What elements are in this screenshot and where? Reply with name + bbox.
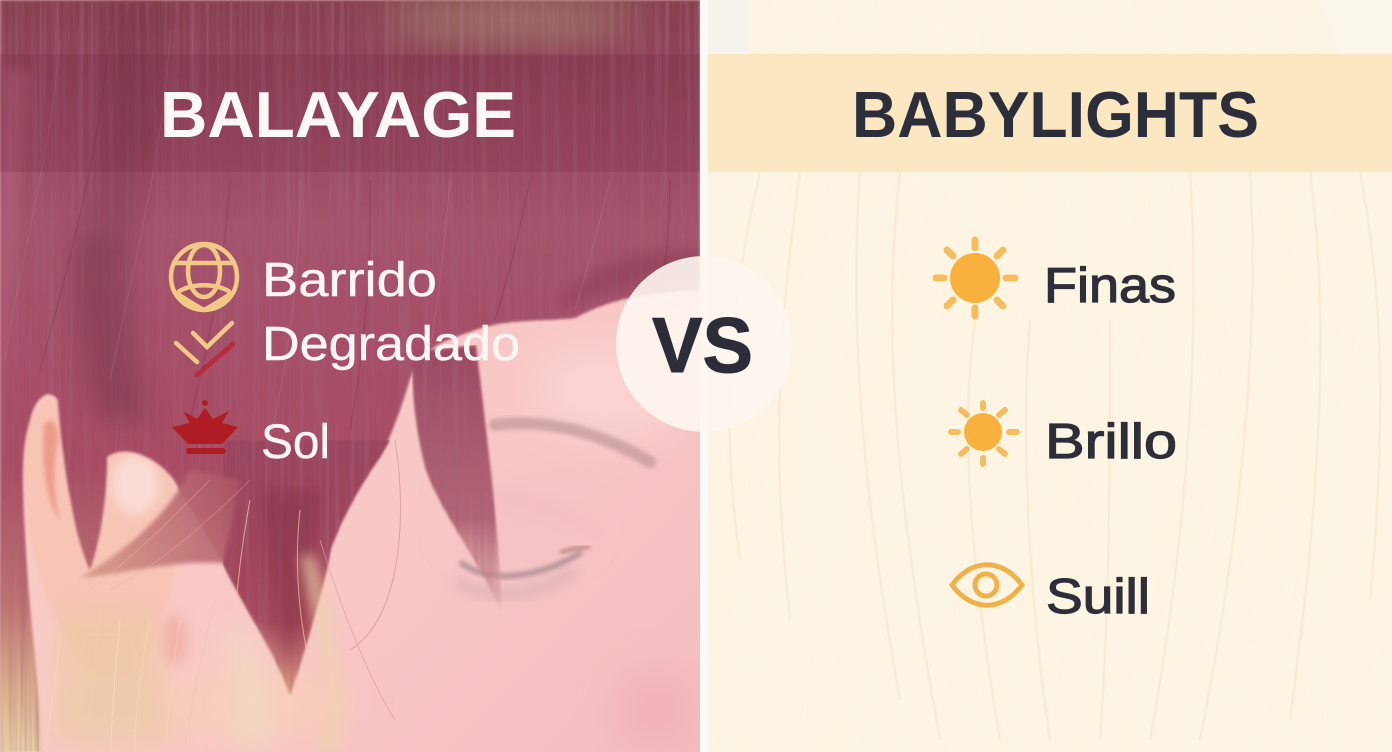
item: Degradado — [176, 318, 520, 375]
fine strands — [5, 30, 670, 590]
ear — [22, 392, 178, 680]
label: Brillo: Brillo — [1045, 415, 1177, 469]
label: Sol: Sol — [261, 416, 330, 469]
hair mass — [0, 0, 700, 752]
eyebrow — [495, 423, 650, 462]
item: Barrido — [171, 244, 437, 310]
vs badge — [616, 256, 792, 432]
title: babylights: BABYLIGHTS — [852, 78, 1259, 151]
item: Finas — [936, 240, 1176, 316]
vs text: VS — [652, 301, 753, 389]
blond tips — [54, 555, 341, 750]
hair lock main — [223, 440, 390, 695]
item: Suill — [952, 565, 1150, 624]
label: Barrido: Barrido — [262, 254, 437, 307]
icon: sun — [936, 240, 1015, 316]
loose strands — [45, 440, 401, 750]
icon: small sun — [951, 403, 1017, 464]
hair lock near eye — [412, 345, 502, 612]
closed eye and lashes — [455, 495, 600, 594]
pale hair strands — [730, 172, 1380, 740]
icon: crown — [172, 400, 238, 454]
hair curl over ear — [80, 470, 240, 578]
icon: globe — [171, 244, 237, 310]
panel: balayage photo — [0, 0, 700, 752]
header band: balayage — [0, 54, 700, 172]
label: Finas: Finas — [1044, 259, 1176, 313]
label: Suill: Suill — [1046, 570, 1150, 624]
face shading — [150, 340, 695, 750]
icon: eye — [952, 565, 1022, 605]
title: balayage: BALAYAGE — [160, 78, 516, 151]
label: Degradado: Degradado — [262, 318, 520, 371]
header band: babylights — [708, 54, 1392, 172]
icon: gradient checks — [176, 323, 233, 375]
panel: babylights background — [708, 0, 1392, 752]
divider gap — [700, 0, 708, 752]
hair tones — [0, 0, 700, 670]
item: Sol — [172, 400, 330, 469]
item: Brillo — [951, 403, 1177, 469]
